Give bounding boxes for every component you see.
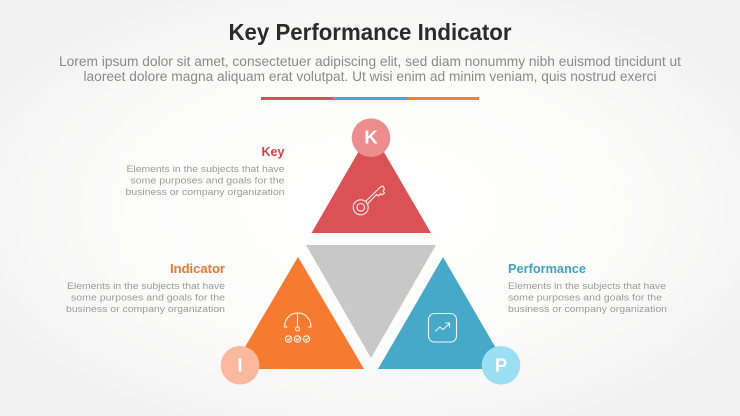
badge: I [221,346,259,385]
text block: indicator: some purposes and goals for the [71,292,225,304]
text block: indicator [66,262,225,315]
tricolor divider [261,97,479,100]
icon: gauge [284,313,311,342]
text block: performance: business or company organization [508,304,667,315]
text block: indicator: business or company organization [66,304,225,315]
text block: indicator: Indicator [170,262,225,276]
text block: key: Elements in the subjects that have [126,164,284,175]
subtitle: laoreet dolore magna aliquam erat volutpat. Ut wisi enim ad minim veniam, quis nostrud exerci [84,69,656,84]
subtitle [59,54,681,84]
icon: key [353,186,384,215]
badge: K: K [364,126,378,148]
panel: key triangle [312,118,431,233]
text block: key: Key [262,145,285,159]
text block: key: business or company organization [126,187,284,198]
subtitle: Lorem ipsum dolor sit amet, consectetuer adipiscing elit, sed diam nonummy nibh euismod tincidunt ut [59,54,681,69]
text block: performance: Performance [508,262,586,276]
title: Key Performance Indicator [228,19,512,45]
center gray triangle [306,245,436,358]
text block: performance [508,262,667,315]
badge: P [482,346,520,385]
text block: performance: Elements in the subjects that have [508,281,666,292]
text block: indicator: Elements in the subjects that have [67,281,225,292]
text block: key: some purposes and goals for the [130,176,284,186]
badge: I: I [237,354,243,376]
icon: growth chart [428,314,456,342]
text block: performance: some purposes and goals for the [508,292,662,304]
panel: indicator triangle [221,257,364,385]
badge: P: P [495,354,507,376]
panel: performance triangle [378,257,520,385]
text block: key [126,145,285,198]
